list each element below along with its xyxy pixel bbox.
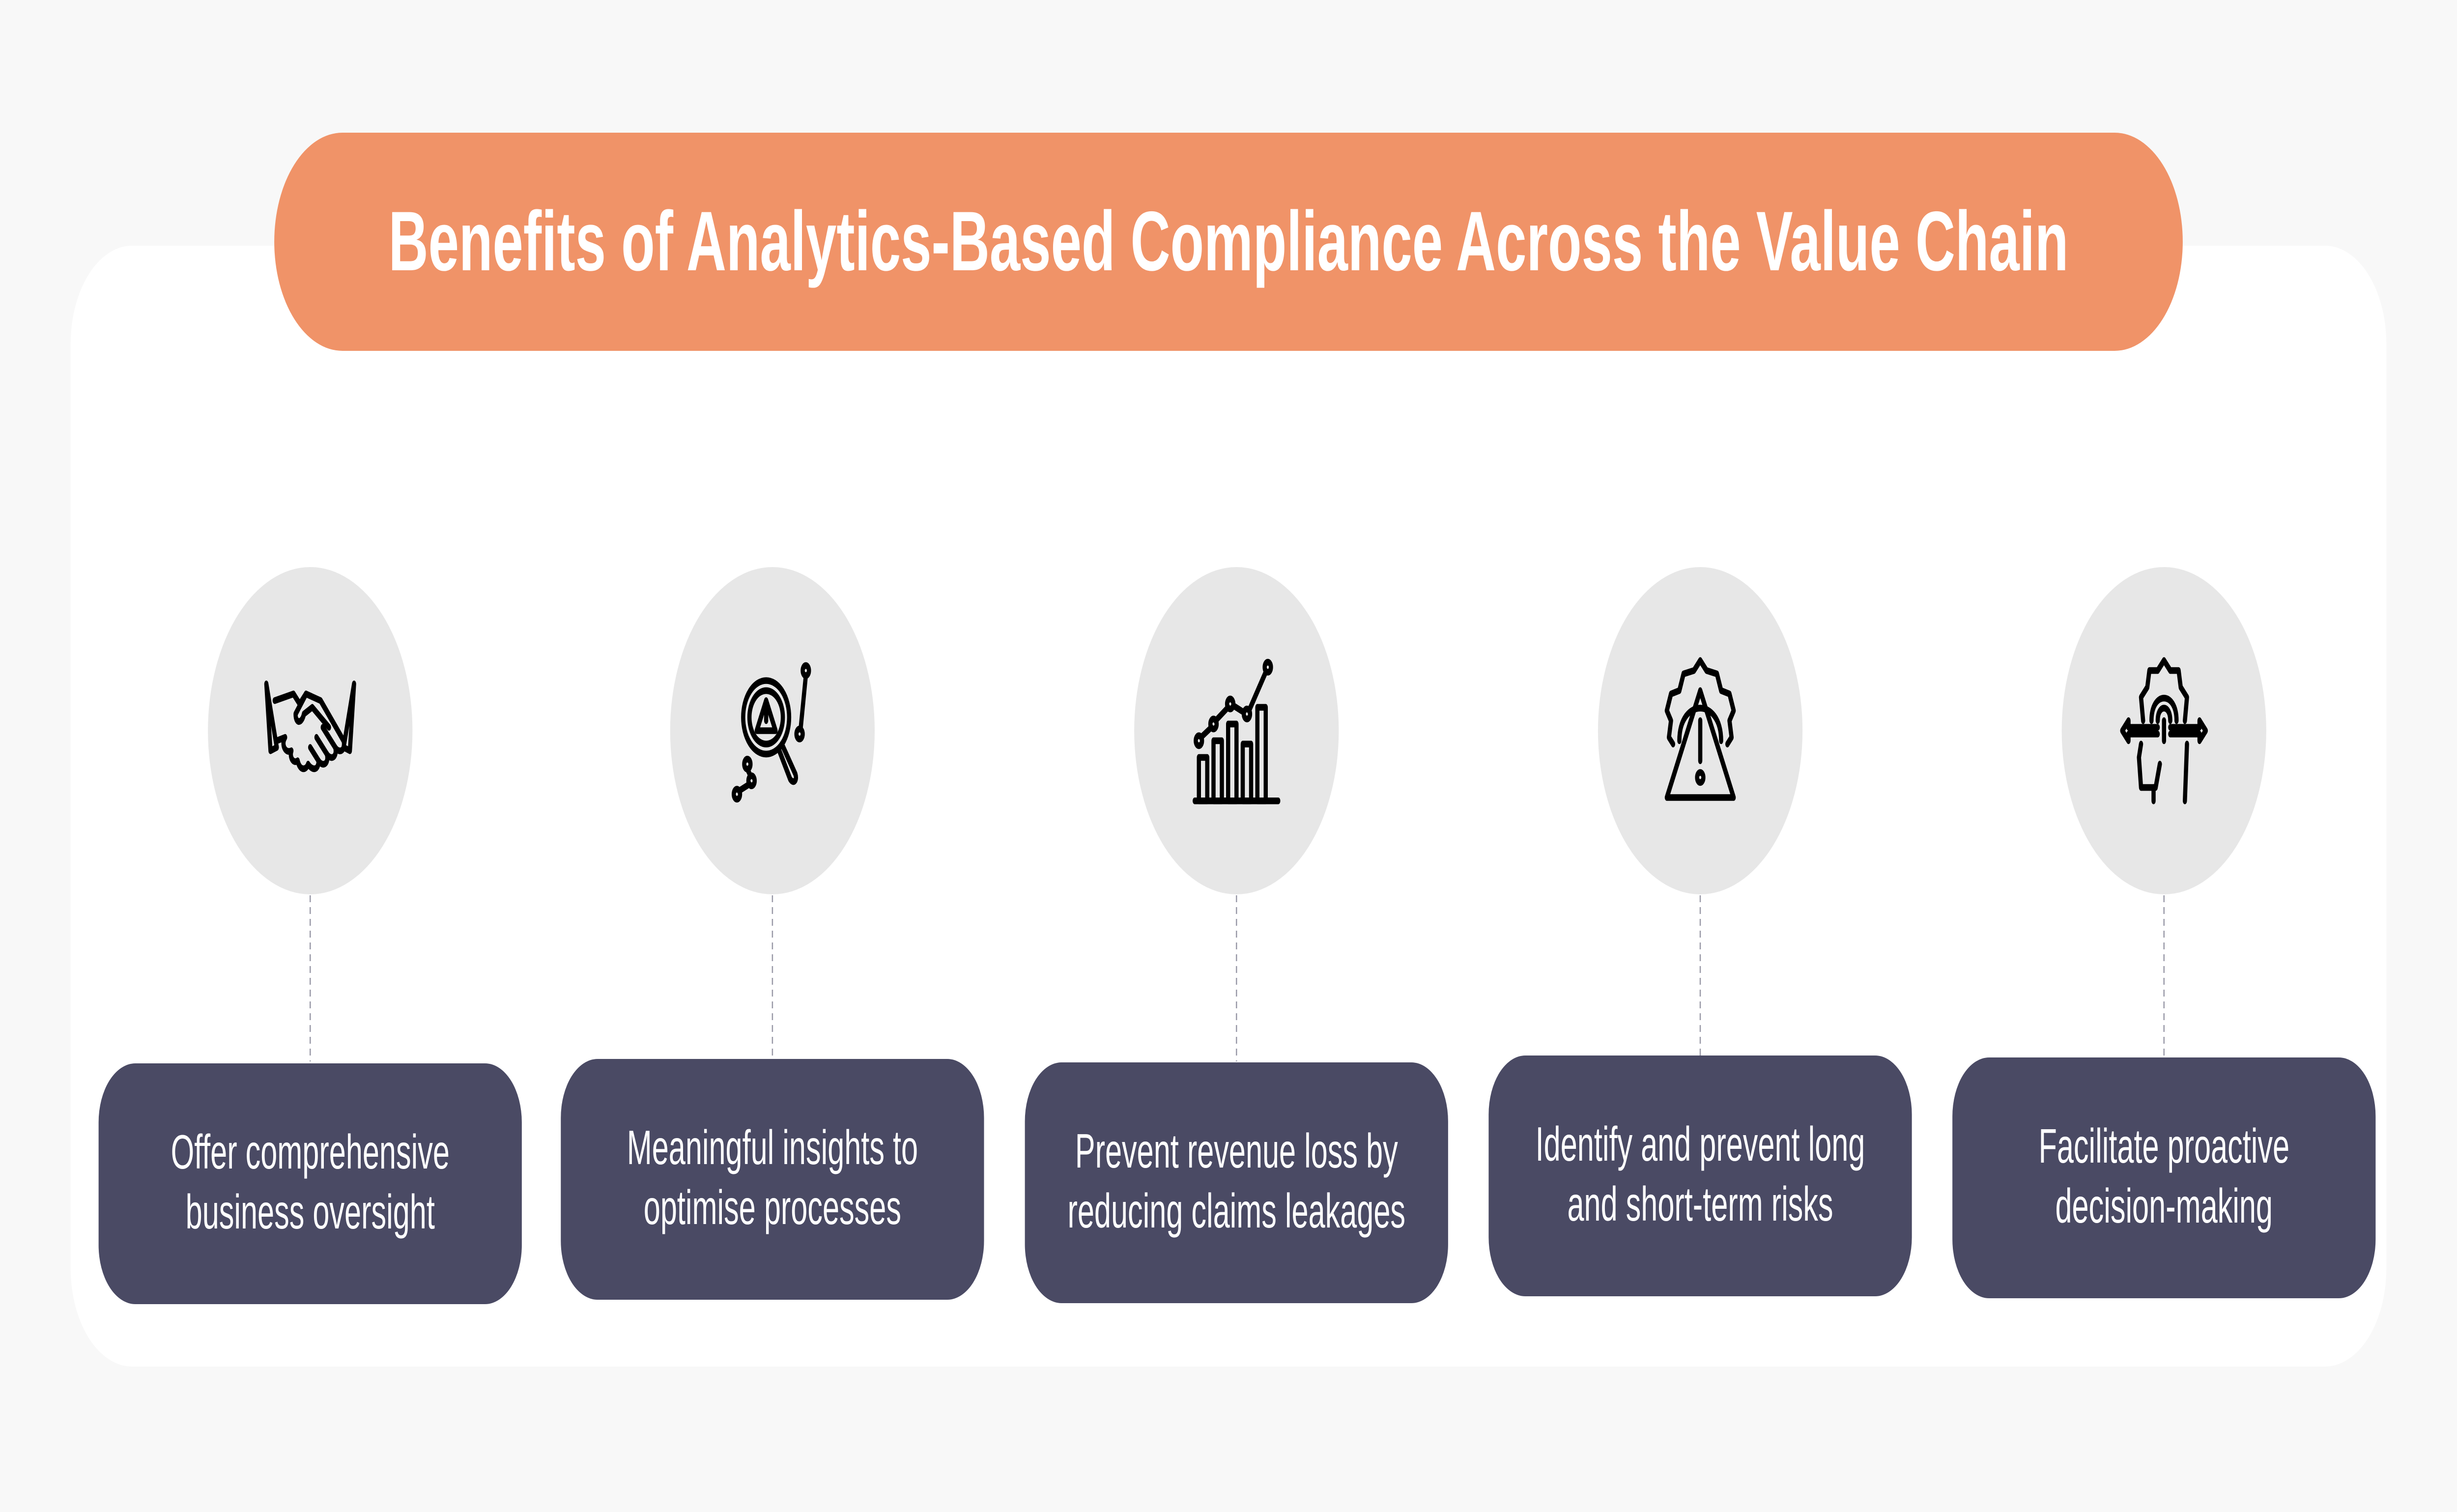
text box: reducing claims leakages	[1067, 1184, 1405, 1238]
item 3: revenue	[1025, 567, 1448, 1303]
title: Benefits of Analytics-Based Compliance Across the Value Chain	[389, 194, 2068, 288]
icon: gear with warning triangle	[1598, 567, 1802, 894]
panel: white background card	[71, 246, 2386, 1367]
item 4: risks	[1488, 567, 1912, 1296]
text box: Prevent revenue loss by	[1075, 1124, 1398, 1178]
text box	[1952, 1057, 2375, 1298]
icon: bar chart with trend	[1134, 567, 1339, 894]
icon: magnifier with warning	[670, 567, 875, 894]
text box: Identify and prevent long	[1536, 1117, 1865, 1171]
icon: handshake	[208, 567, 412, 894]
text box: Meaningful insights to	[627, 1121, 918, 1175]
text box	[561, 1059, 984, 1300]
item 1: business oversight	[99, 567, 522, 1304]
text box: and short-term risks	[1567, 1177, 1833, 1231]
item 5: decision-making	[1952, 567, 2375, 1298]
text box	[1025, 1062, 1448, 1303]
text box: Offer comprehensive	[171, 1125, 450, 1179]
text box: business oversight	[186, 1185, 435, 1239]
text box: decision-making	[2056, 1179, 2273, 1233]
text box	[1488, 1056, 1912, 1296]
item 2: insights	[561, 567, 984, 1300]
text box: optimise processes	[644, 1181, 901, 1235]
title	[274, 133, 2183, 351]
icon: head with gear and arrows	[2062, 567, 2266, 894]
text box: Facilitate proactive	[2038, 1119, 2289, 1173]
text box	[99, 1063, 522, 1304]
